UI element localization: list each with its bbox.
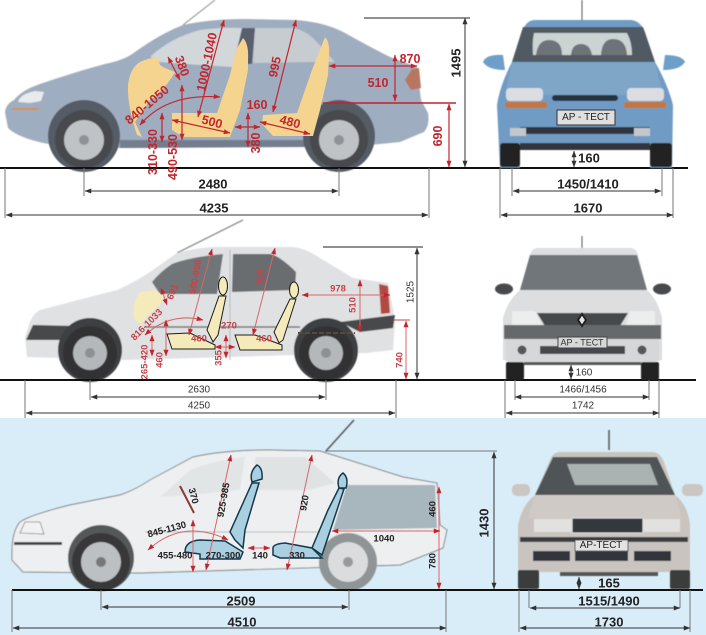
wheelbase dimension: 2509: [227, 594, 255, 608]
width dimension: 1730: [595, 614, 623, 630]
interior red dimensions: 690: [431, 126, 445, 146]
interior red dimensions: 460: [256, 334, 272, 344]
ground clearance dimension: [579, 576, 620, 590]
interior dimensions: 330: [289, 550, 305, 562]
width dimension: 1670: [574, 200, 602, 216]
extension lines: [505, 380, 659, 418]
interior red dimensions: 1000-1040: [194, 31, 220, 93]
ground line: [12, 589, 703, 591]
seats: front seat and dash: [128, 37, 329, 137]
overall height dimension: [323, 247, 423, 379]
interior red dimensions: 870: [400, 52, 420, 66]
interior red dimensions: [129, 248, 410, 379]
license plate: AP-ТЕСТ: [580, 540, 622, 551]
interior red dimensions: 995: [266, 55, 284, 79]
panel: Chevrolet side view: [0, 0, 688, 218]
interior dimensions: 460: [428, 501, 438, 517]
interior red dimensions: 935: [254, 268, 268, 286]
interior red dimensions: 310-330: [146, 129, 160, 175]
car front illustration: blue hatchback: [483, 0, 685, 168]
car side illustration: silver sedan: [25, 220, 395, 382]
overall height dimension: 1430: [476, 509, 492, 537]
interior red dimensions: 510: [368, 76, 388, 90]
extension lines: [5, 168, 429, 218]
overall height dimension: 1495: [448, 49, 464, 77]
interior red dimensions: 380: [249, 133, 263, 153]
interior red dimensions: 500: [200, 113, 224, 131]
ground clearance dimension: 165: [598, 576, 620, 590]
interior dimensions: 455-480: [158, 550, 192, 562]
license plate: [557, 110, 615, 125]
panel: Skoda side view: [12, 420, 703, 632]
overall length dimension: 4510: [228, 614, 256, 630]
interior red dimensions: 160: [247, 98, 267, 112]
interior red dimensions: 980-990: [188, 259, 204, 295]
panel: Renault front view: [495, 236, 671, 418]
wheelbase dimension: 2480: [199, 176, 227, 192]
emblem: [578, 314, 586, 326]
width dimension: 1742: [572, 400, 595, 412]
ground clearance dimension: 160: [576, 368, 593, 378]
interior red dimensions: 270: [221, 320, 237, 332]
wheelbase dimension: 2630: [188, 384, 211, 396]
interior red dimensions: 490-530: [166, 134, 180, 180]
interior red dimensions: 355: [214, 349, 224, 366]
seats: front and rear: [133, 277, 298, 350]
panel: Chevrolet front view: [483, 0, 685, 218]
interior red dimensions: 460: [154, 352, 166, 368]
interior red dimensions: 840-1050: [122, 83, 172, 127]
interior red dimensions: 460: [191, 334, 207, 344]
interior red dimensions: 740: [394, 352, 406, 368]
seats: front and rear: [185, 465, 347, 559]
interior dimensions: 370: [186, 487, 200, 505]
panel: Renault side view: [0, 220, 696, 418]
license plate: AP - ТЕСТ: [562, 112, 610, 123]
overall height dimension: 1525: [406, 280, 416, 303]
interior dimensions: 780: [428, 553, 438, 569]
panel: bottom car background: [0, 418, 706, 635]
interior red dimensions: 480: [278, 113, 302, 131]
track dimension: 1450/1410: [557, 176, 619, 192]
interior red dimensions: 978: [330, 284, 346, 294]
ground line: [0, 167, 688, 169]
ground line: [0, 379, 696, 381]
interior red dimensions: 380: [172, 54, 192, 78]
panel: Skoda front view: [512, 430, 703, 632]
car side illustration: white sedan: [12, 420, 447, 591]
extension lines: [25, 380, 396, 418]
license plate: AP - ТЕСТ: [560, 338, 604, 348]
track dimension: [515, 384, 649, 397]
interior red dimensions: 691: [165, 282, 181, 301]
interior red dimensions: 510: [348, 297, 358, 313]
car front illustration: silver hatchback: [512, 430, 703, 589]
track dimension: 1515/1490: [578, 594, 640, 608]
overall length dimension: 4250: [188, 400, 211, 412]
interior dimensions: 925-985: [216, 481, 233, 518]
interior dimensions: [146, 455, 440, 589]
interior red dimensions: 265-420: [140, 345, 150, 379]
interior dimensions: 270-300: [206, 550, 240, 562]
interior dimensions: 845-1130: [146, 520, 188, 540]
overall length dimension: 4235: [200, 200, 228, 216]
interior red dimensions: 816-1033: [129, 307, 165, 343]
ground clearance dimension: 160: [578, 150, 600, 166]
interior dimensions: 140: [252, 550, 268, 562]
track dimension: 1466/1456: [559, 384, 607, 396]
interior dimensions: 1040: [373, 534, 395, 544]
extension lines: [12, 590, 446, 632]
car side illustration: blue sedan: [5, 0, 428, 172]
interior dimensions: 920: [298, 494, 312, 512]
interior red dimensions: [122, 20, 456, 180]
ground clearance dimension: [571, 365, 593, 379]
extension lines: [500, 168, 673, 218]
extension lines: [519, 590, 690, 632]
car front illustration: silver sedan: [495, 236, 671, 380]
